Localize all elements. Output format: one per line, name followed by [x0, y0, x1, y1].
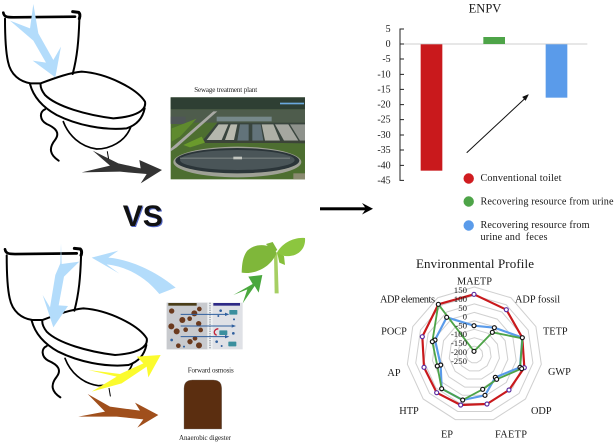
radar axis labels: ADP fossil — [515, 294, 560, 306]
y axis labels: -5 — [382, 54, 391, 65]
arrow: feces to digester — [78, 394, 158, 428]
label: anaerobic digester: Anaerobic digester — [179, 434, 232, 442]
y axis labels: 5 — [386, 24, 391, 35]
legend: Recovering resource from urine — [480, 196, 614, 208]
radar scale labels: 150 — [454, 285, 468, 295]
radar series: urine — [432, 304, 522, 400]
radar scale labels: 100 — [454, 294, 468, 304]
arrow: water back to tank — [92, 251, 176, 294]
heading: ENPV: ENPV — [469, 2, 501, 16]
radar axis labels: POCP — [381, 326, 407, 338]
radar axis labels — [380, 276, 571, 440]
radar axis labels: GWP — [548, 367, 571, 378]
legend: Conventional toilet — [480, 173, 562, 184]
photo: sewage treatment plant — [171, 97, 305, 179]
bar: recovering from urine — [483, 37, 505, 44]
icon: plant seedling — [242, 238, 305, 293]
radar scale labels: 50 — [458, 303, 468, 313]
radar scale labels: 0 — [463, 312, 468, 322]
arrow: sewage to plant — [82, 151, 162, 183]
radar markers: recovery — [430, 302, 524, 402]
bar chart: ENPV — [377, 24, 587, 186]
radar scale labels: -250 — [451, 356, 468, 366]
radar markers: conventional — [420, 292, 526, 407]
y axis labels: -10 — [377, 69, 391, 80]
legend: Recovering resource from — [480, 220, 590, 231]
heading: VS: VS — [124, 201, 164, 234]
bar: recovering from urine and feces — [546, 44, 567, 98]
arrow: flush water recycled — [43, 243, 79, 327]
radar grid — [407, 287, 541, 420]
arrow: improvement trend — [467, 94, 528, 153]
y axis labels: -25 — [377, 115, 391, 126]
label: sewage treatment plant: Sewage treatment plant — [194, 86, 257, 94]
radar axis labels: EP — [441, 430, 453, 440]
heading: environmental profile: Environmental Profile — [416, 256, 534, 271]
legend — [464, 173, 614, 243]
y axis labels: 0 — [386, 39, 391, 50]
icon: anaerobic digester — [184, 380, 222, 429]
radar axis labels: TETP — [543, 326, 568, 338]
arrow: nutrients to plant — [233, 275, 262, 303]
radar chart: environmental profile — [407, 287, 541, 420]
arrow: flush water — [10, 4, 61, 77]
radar series: urine and feces — [435, 317, 522, 400]
y axis labels: -20 — [377, 100, 391, 111]
legend: urine and feces — [480, 232, 548, 243]
y axis labels — [377, 24, 391, 186]
radar axis labels: ODP — [531, 406, 552, 417]
radar axis labels: MAETP — [457, 276, 492, 288]
radar scale labels: -150 — [451, 338, 468, 348]
y axis labels: -30 — [377, 130, 391, 141]
radar scale labels — [451, 285, 468, 366]
y axis labels: -15 — [377, 84, 391, 95]
y axis labels: -40 — [377, 160, 391, 171]
radar scale labels: -200 — [451, 347, 468, 357]
radar axis labels: FAETP — [495, 430, 527, 440]
radar axis labels: ADP elements — [380, 294, 435, 306]
radar axis labels: HTP — [399, 406, 419, 417]
diagram: forward osmosis membrane — [167, 303, 243, 349]
label: forward osmosis: Forward osmosis — [188, 366, 234, 374]
bar: conventional toilet — [421, 44, 442, 171]
arrow: urine to forward osmosis — [88, 355, 161, 392]
heading: VS: VS — [123, 200, 163, 233]
radar scale labels: -100 — [451, 329, 468, 339]
arrow: toward results — [320, 203, 373, 214]
y axis labels: -35 — [377, 145, 391, 156]
y axis labels: -45 — [377, 175, 391, 186]
radar scale labels: -50 — [455, 320, 468, 330]
radar series: conventional toilet — [422, 294, 524, 405]
radar axis labels: AP — [387, 368, 401, 379]
icon: conventional toilet — [3, 12, 145, 161]
y axis — [400, 29, 404, 180]
icon: resource recovery toilet — [5, 248, 147, 397]
